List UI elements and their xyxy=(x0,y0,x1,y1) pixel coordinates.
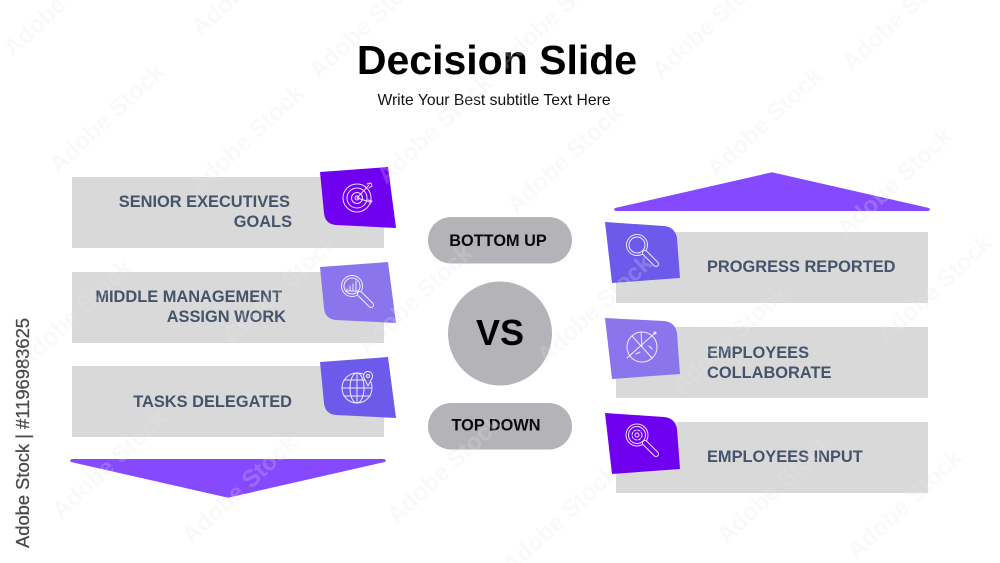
circle: vs xyxy=(448,282,552,386)
circle: vs: VS xyxy=(476,312,524,353)
panel: right column, bottom up xyxy=(605,172,930,493)
bar: senior executives goals xyxy=(72,177,384,248)
stock id vertical text: Adobe Stock | #1196983625 xyxy=(13,318,33,548)
arrow: up xyxy=(614,172,930,211)
arrow: down xyxy=(70,459,386,498)
watermark layer: Adobe Stock xyxy=(532,249,658,369)
watermark layer: Adobe Stock xyxy=(372,69,498,189)
watermark layer: Adobe Stock xyxy=(712,429,838,549)
watermark layer: Adobe Stock xyxy=(382,409,508,529)
panel: left column, top down xyxy=(70,167,396,498)
tag: globe pin icon xyxy=(320,357,396,418)
watermark layer: Adobe Stock xyxy=(842,444,968,563)
bar: middle management assign work: MIDDLE MANAGEMENT xyxy=(95,288,282,306)
bar: middle management assign work xyxy=(72,272,384,343)
bar: employees collaborate: COLLABORATE xyxy=(707,364,832,382)
panel: center comparison xyxy=(428,217,572,450)
pill: top down: TOP DOWN xyxy=(452,416,540,434)
bar: employees input: EMPLOYEES INPUT xyxy=(707,448,863,466)
subtitle: Write Your Best subtitle Text Here xyxy=(377,92,611,109)
bar: tasks delegated: TASKS DELEGATED xyxy=(133,393,292,411)
watermark layer: Adobe Stock xyxy=(832,122,958,242)
watermark layer: Adobe Stock xyxy=(352,239,478,359)
pill: top down xyxy=(428,403,572,450)
watermark layer: Adobe Stock xyxy=(47,404,173,524)
bar: progress reported xyxy=(616,232,928,303)
bar: employees collaborate xyxy=(616,327,928,398)
bar: employees input xyxy=(616,422,928,493)
watermark layer: Adobe Stock xyxy=(667,279,793,399)
pill: bottom up: BOTTOM UP xyxy=(449,232,547,250)
tag: magnifier gear icon xyxy=(605,413,680,474)
watermark layer: Adobe Stock xyxy=(702,62,828,182)
watermark layer: Adobe Stock xyxy=(12,254,138,374)
watermark layer: Adobe Stock xyxy=(217,229,343,349)
tag: compass diagram icon xyxy=(605,318,680,379)
bar: middle management assign work: ASSIGN WORK xyxy=(167,308,286,326)
watermark layer: Adobe Stock xyxy=(872,229,998,349)
tag: magnifier icon xyxy=(605,222,680,283)
watermark layer: Adobe Stock xyxy=(502,99,628,219)
tag: magnifier chart icon xyxy=(320,262,396,323)
watermark layer: Adobe Stock xyxy=(177,429,303,549)
watermark layer: Adobe Stock xyxy=(44,58,170,178)
tag: target icon xyxy=(320,167,396,228)
watermark layer: Adobe Stock xyxy=(184,79,310,199)
bar: senior executives goals: SENIOR EXECUTIVES xyxy=(119,193,290,211)
pill: bottom up xyxy=(428,217,572,264)
bar: progress reported: PROGRESS REPORTED xyxy=(707,258,896,276)
bar: employees collaborate: EMPLOYEES xyxy=(707,344,809,362)
title: Decision Slide xyxy=(357,37,637,83)
bar: tasks delegated xyxy=(72,366,384,437)
bar: senior executives goals: GOALS xyxy=(234,213,292,231)
